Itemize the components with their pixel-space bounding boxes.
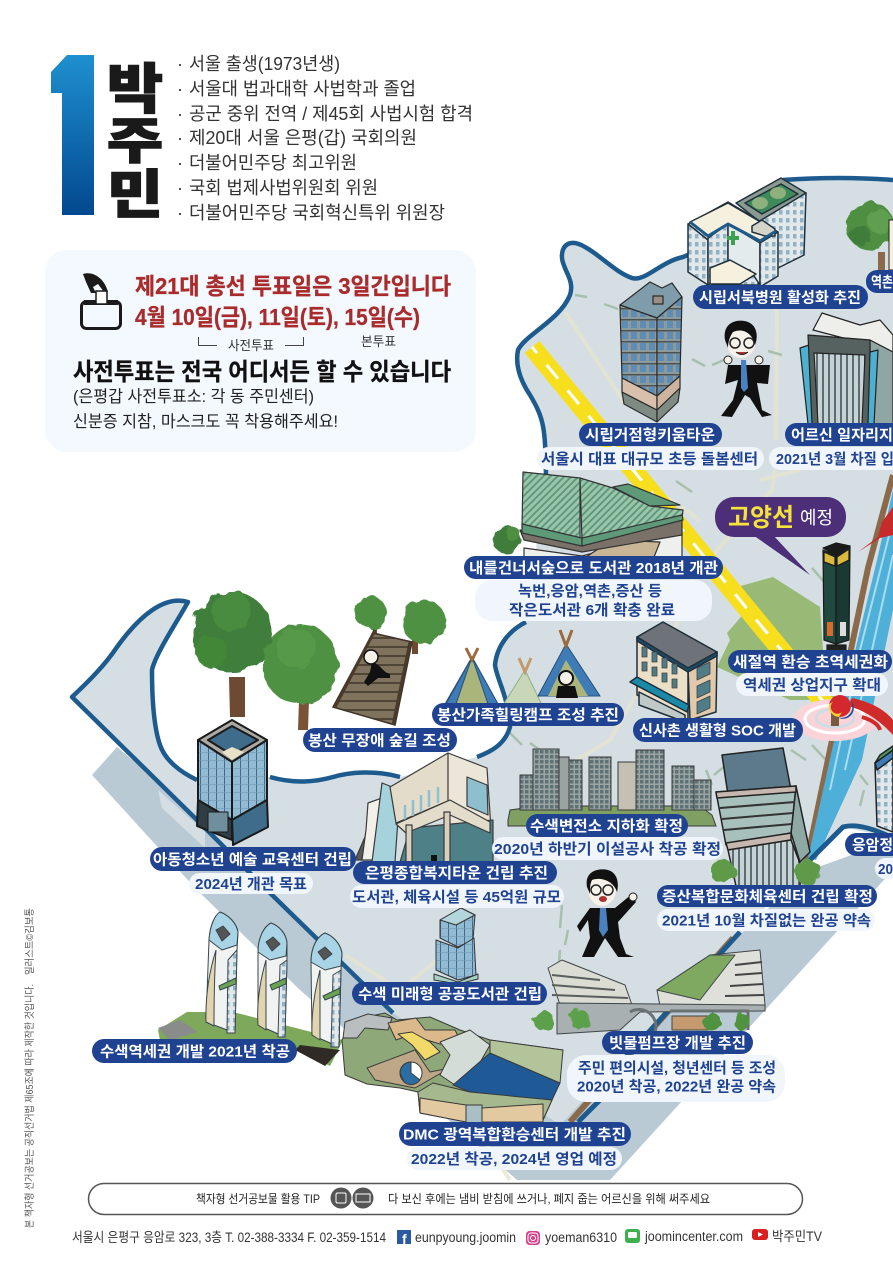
map outline xyxy=(72,178,893,1013)
icon: chat xyxy=(625,1229,640,1243)
label: seobuk hospital: 시립서북병원 활성화 추진 xyxy=(699,290,861,306)
tower 1 xyxy=(206,912,238,1033)
label: bongsan camp xyxy=(432,703,624,726)
early voting headline: 사전투표는 전국 어디서든 할 수 있습니다 xyxy=(73,359,451,386)
speech bubble: goyang line: 고양선 xyxy=(728,504,794,532)
facebook handle: eunpyoung.joomin xyxy=(415,1230,516,1245)
caption: eungam xyxy=(875,858,893,879)
tree: yeokchon xyxy=(846,202,893,272)
label: kium town: 시립거점형키움타운 xyxy=(585,427,715,444)
icon: taegeuk marker xyxy=(829,695,854,719)
label: substation xyxy=(526,814,688,837)
career list xyxy=(177,54,473,223)
early voting bracket: 사전투표 xyxy=(228,338,274,353)
icon: trivet xyxy=(330,1188,352,1208)
tip text: 다 보신 후에는 냄비 받침에 쓰거나, 폐지 줍는 어르신을 위해 써주세요 xyxy=(388,1192,710,1206)
label: dmc: DMC 광역복합환승센터 개발 추진 xyxy=(403,1126,626,1144)
speech bubble: goyang line xyxy=(715,497,846,575)
apartments: susaek substation xyxy=(508,749,716,826)
tents: bongsan healing camp xyxy=(445,630,600,705)
career list: 공군 중위 전역 / 제45회 사법시험 합격 xyxy=(189,104,473,124)
label: senior job center: 어르신 일자리지 xyxy=(791,427,893,444)
label: saejeol station: 새절역 환승 초역세권화 xyxy=(733,654,888,671)
label: sinsachon soc: 신사촌 생활형 SOC 개발 xyxy=(639,722,796,740)
icon: recycled paper xyxy=(352,1188,374,1208)
career list: · xyxy=(177,79,183,99)
character: candidate in tent xyxy=(556,671,578,698)
label: susaek library xyxy=(352,982,547,1005)
label: naereul library: 내를건너서숲으로 도서관 2018년 개관 xyxy=(469,560,718,577)
wooden stair path xyxy=(333,630,412,725)
label: youth art center xyxy=(150,847,356,871)
building: jeungsan sports center xyxy=(711,748,821,886)
career list: 국회 법제사법위원회 위원 xyxy=(189,178,378,198)
red headline xyxy=(135,273,451,330)
ring: saejeol station marker xyxy=(793,695,893,741)
number 1 xyxy=(51,55,94,215)
tower ground xyxy=(158,1012,343,1066)
pale local roads xyxy=(345,305,800,1180)
label: bongsan trail xyxy=(303,728,457,752)
caption: saejeol station: 역세권 상업지구 확대 xyxy=(743,677,881,694)
towers: susaek station area xyxy=(158,912,343,1066)
label: rainwater pump: 빗물펌프장 개발 추진 xyxy=(609,1035,746,1052)
character: candidate pointing xyxy=(577,869,637,957)
east boundary xyxy=(578,826,893,1122)
label: welfare town xyxy=(353,861,557,884)
building: kium town tower xyxy=(620,282,682,422)
address: 서울시 은평구 응암로 323, 3층 T. 02-388-3334 F. 02-359-1514 xyxy=(72,1230,386,1245)
candidate name: 박 xyxy=(107,60,163,120)
river xyxy=(808,490,893,860)
label: bongsan trail: 봉산 무장애 숲길 조성 xyxy=(308,732,451,750)
caption: small libraries: 작은도서관 6개 확충 완료 xyxy=(509,602,675,619)
station sign tower xyxy=(823,543,850,654)
land patch xyxy=(158,790,205,848)
vertical disclaimer: 일러스트©김보통 xyxy=(24,908,36,975)
label: senior job center xyxy=(785,423,893,446)
complex: rainwater pump facility xyxy=(533,950,765,1034)
career list: 서울 출생(1973년생) xyxy=(189,54,340,74)
caption: rainwater pump: 2020년 착공, 2022년 완공 약속 xyxy=(577,1078,776,1096)
label: susaek station area xyxy=(92,1039,297,1063)
brown road xyxy=(570,475,893,1122)
icon: ballot box xyxy=(82,273,120,328)
label: saejeol station xyxy=(728,650,892,673)
career list: · xyxy=(177,54,183,74)
label: bongsan camp: 봉산가족힐링캠프 조성 추진 xyxy=(437,707,619,724)
tip pill xyxy=(88,1184,802,1214)
label: dmc xyxy=(399,1122,631,1146)
candidate name: 주 xyxy=(107,115,163,169)
map shadow xyxy=(92,747,893,1180)
caption: dmc schedule xyxy=(407,1147,622,1170)
career list: · xyxy=(177,104,183,124)
vertical disclaimer: 본 책자형 선거공보는 공직선거법 제65조에 따라 제작한 것입니다. xyxy=(23,984,36,1228)
tip heading: 책자형 선거공보물 활용 TIP xyxy=(196,1191,320,1206)
label: susaek station area: 수색역세권 개발 2021년 착공 xyxy=(100,1044,290,1060)
label: yeokchon xyxy=(866,270,893,293)
label: sinsachon soc xyxy=(633,718,803,742)
building: eungam edge xyxy=(875,746,893,832)
election day label: 본투표 xyxy=(361,334,396,349)
complex: dmc transfer center xyxy=(342,1013,563,1123)
building: glass youth art center xyxy=(197,720,268,845)
building: sinsachon soc xyxy=(630,622,717,722)
character: candidate with hands up xyxy=(721,321,772,417)
icon: instagram xyxy=(526,1231,540,1245)
label: eungam: 응암정 xyxy=(852,837,893,854)
speech bubble: goyang line: 예정 xyxy=(800,508,833,528)
caption: rainwater pump xyxy=(567,1055,785,1102)
career list: · xyxy=(177,203,183,223)
building: naereul library xyxy=(493,472,683,557)
label: youth art center: 아동청소년 예술 교육센터 건립 xyxy=(153,852,352,868)
early voting bracket xyxy=(198,337,304,353)
youtube channel: 박주민TV xyxy=(772,1229,822,1244)
red speech bubble xyxy=(858,507,893,552)
instagram handle: yoeman6310 xyxy=(545,1230,617,1245)
career list: · xyxy=(177,153,183,173)
yellow road xyxy=(532,347,832,712)
green park xyxy=(717,577,838,700)
caption: jeungsan center: 2021년 10월 차질없는 완공 약속 xyxy=(662,912,871,930)
label: jeungsan center: 증산복합문화체육센터 건립 확정 xyxy=(662,888,873,906)
caption: small libraries: 녹번,응암,역촌,증산 등 xyxy=(518,583,662,600)
icon: youtube xyxy=(752,1229,768,1240)
labels xyxy=(92,270,893,1170)
red headline: 제21대 총선 투표일은 3일간입니다 xyxy=(135,273,451,299)
caption: substation schedule xyxy=(492,837,723,860)
icon: facebook: f xyxy=(402,1231,407,1247)
tower 3 xyxy=(311,933,342,1047)
candidate name: 민 xyxy=(107,167,163,225)
caption: senior job center xyxy=(769,447,893,470)
candidate name xyxy=(107,60,163,225)
website: joomincenter.com xyxy=(644,1229,743,1244)
red headline: 4월 10일(금), 11일(토), 15일(수) xyxy=(135,304,420,330)
label: rainwater pump xyxy=(602,1031,753,1054)
label: naereul library xyxy=(464,556,723,579)
label: susaek library: 수색 미래형 공공도서관 건립 xyxy=(358,986,542,1003)
caption: dmc schedule: 2022년 착공, 2024년 영업 예정 xyxy=(411,1151,617,1168)
map base xyxy=(72,178,893,1180)
caption: kium town xyxy=(537,447,764,470)
caption: rainwater pump: 주민 편의시설, 청년센터 등 조성 xyxy=(578,1060,776,1077)
panel: voting notice xyxy=(45,250,476,452)
building: senior job center xyxy=(800,313,893,424)
career list: 더불어민주당 최고위원 xyxy=(189,153,357,173)
caption: small libraries xyxy=(475,580,712,621)
building: susaek library xyxy=(434,908,478,984)
character: resting candidate xyxy=(364,650,390,686)
dashed paths xyxy=(510,295,868,975)
trees: bongsan xyxy=(192,592,446,730)
polling place note: (은평갑 사전투표소: 각 동 주민센터) xyxy=(73,387,314,406)
building: seobuk hospital xyxy=(688,178,806,287)
tower 2 xyxy=(258,923,287,1037)
career list: 더불어민주당 국회혁신특위 위원장 xyxy=(189,203,445,223)
label: welfare town: 은평종합복지타운 건립 추진 xyxy=(365,865,548,882)
land xyxy=(72,180,893,1125)
career list: 서울대 법과대학 사법학과 졸업 xyxy=(189,79,416,99)
id and mask note: 신분증 지참, 마스크도 꼭 착용해주세요! xyxy=(73,412,338,431)
caption: substation schedule: 2020년 하반기 이설공사 착공 확정 xyxy=(494,841,721,858)
building: eunpyeong welfare town xyxy=(355,753,493,862)
caption: kium town: 서울시 대표 대규모 초등 돌봄센터 xyxy=(541,451,758,468)
caption: welfare town: 도서관, 체육시설 등 45억원 규모 xyxy=(352,889,561,906)
caption: saejeol station xyxy=(736,673,888,696)
label: eungam xyxy=(845,833,893,856)
caption: youth art center: 2024년 개관 목표 xyxy=(195,876,307,893)
label: seobuk hospital xyxy=(693,285,868,309)
career list: · xyxy=(177,178,183,198)
icon: facebook xyxy=(397,1230,411,1247)
career list: · xyxy=(177,128,183,148)
footer xyxy=(72,1229,822,1247)
label: kium town xyxy=(579,423,722,446)
label: substation: 수색변전소 지하화 확정 xyxy=(530,818,683,835)
career list: 제20대 서울 은평(갑) 국회의원 xyxy=(189,128,417,148)
